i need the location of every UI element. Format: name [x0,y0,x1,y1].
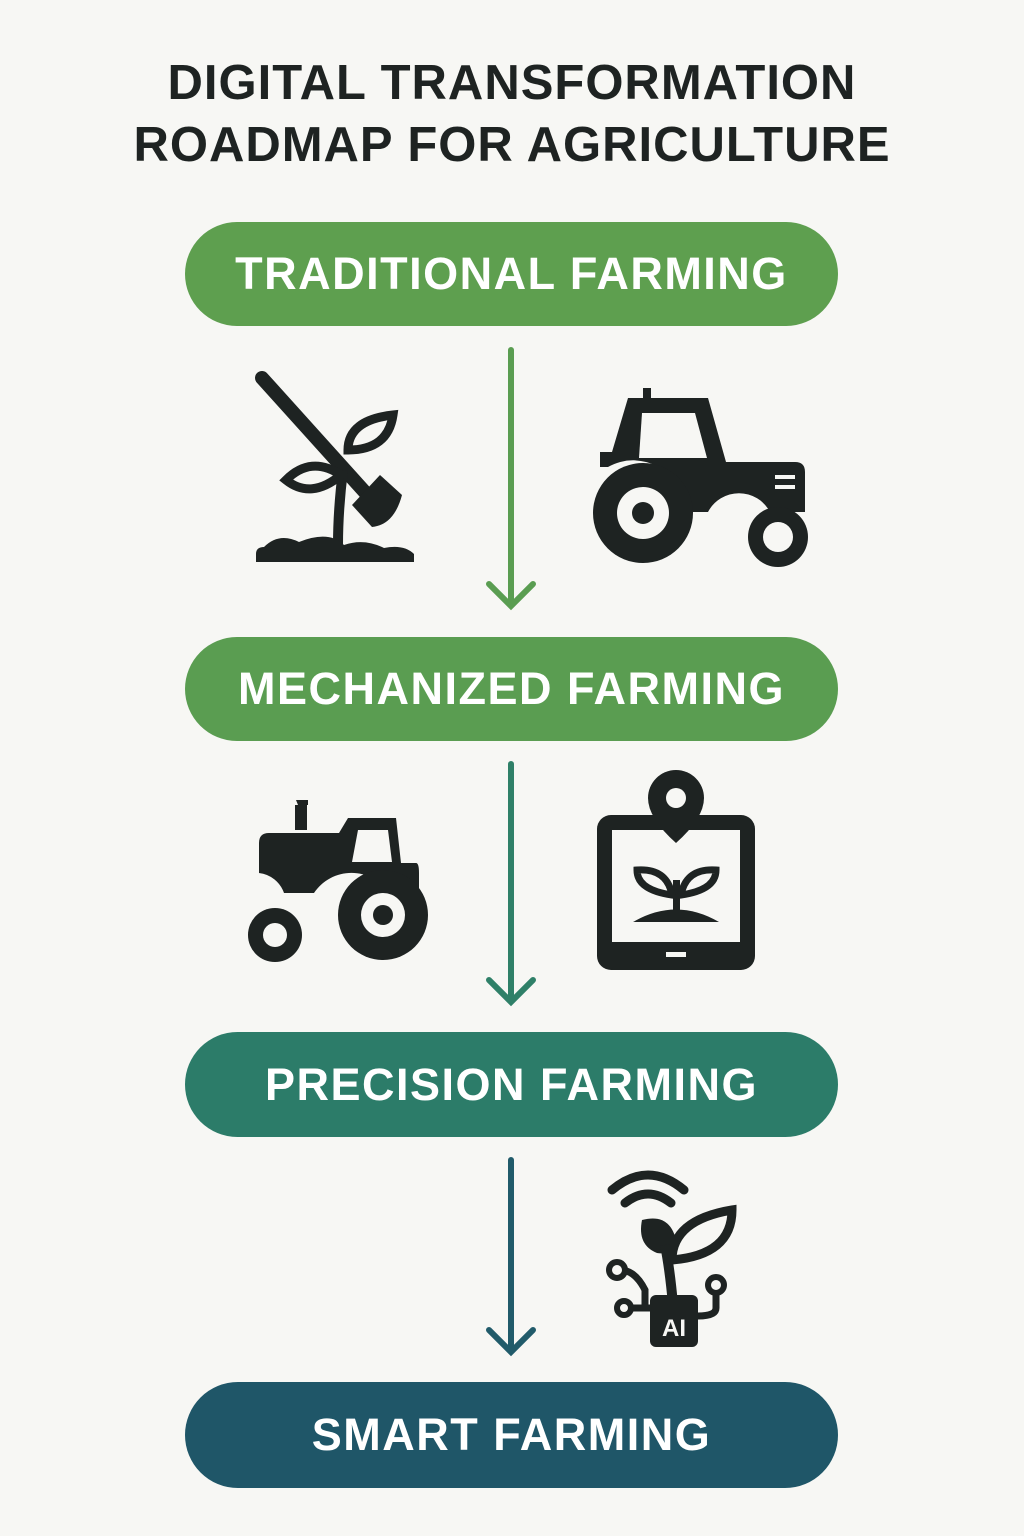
stage: precision farming: PRECISION FARMING [265,1059,758,1110]
stage: mechanized farming [185,637,838,741]
icon: large tractor [593,388,808,567]
stage: smart farming [185,1382,838,1488]
arrow 3 [489,1160,533,1352]
title [133,56,891,172]
title: DIGITAL TRANSFORMATION [168,56,856,110]
arrow 1 [489,350,533,606]
icon: hoe and sprout [256,378,414,562]
stage: traditional farming: TRADITIONAL FARMING [235,248,788,299]
icon: AI plant [609,1175,732,1347]
stage: smart farming: SMART FARMING [312,1409,711,1460]
icon: small tractor [248,800,428,962]
title: ROADMAP FOR AGRICULTURE [133,118,891,172]
icon: tablet with plant and location pin [597,770,755,970]
arrow 2 [489,764,533,1002]
stage: mechanized farming: MECHANIZED FARMING [238,663,785,714]
icon: AI plant: AI [662,1315,686,1342]
stage: traditional farming [185,222,838,326]
stage: precision farming [185,1032,838,1137]
